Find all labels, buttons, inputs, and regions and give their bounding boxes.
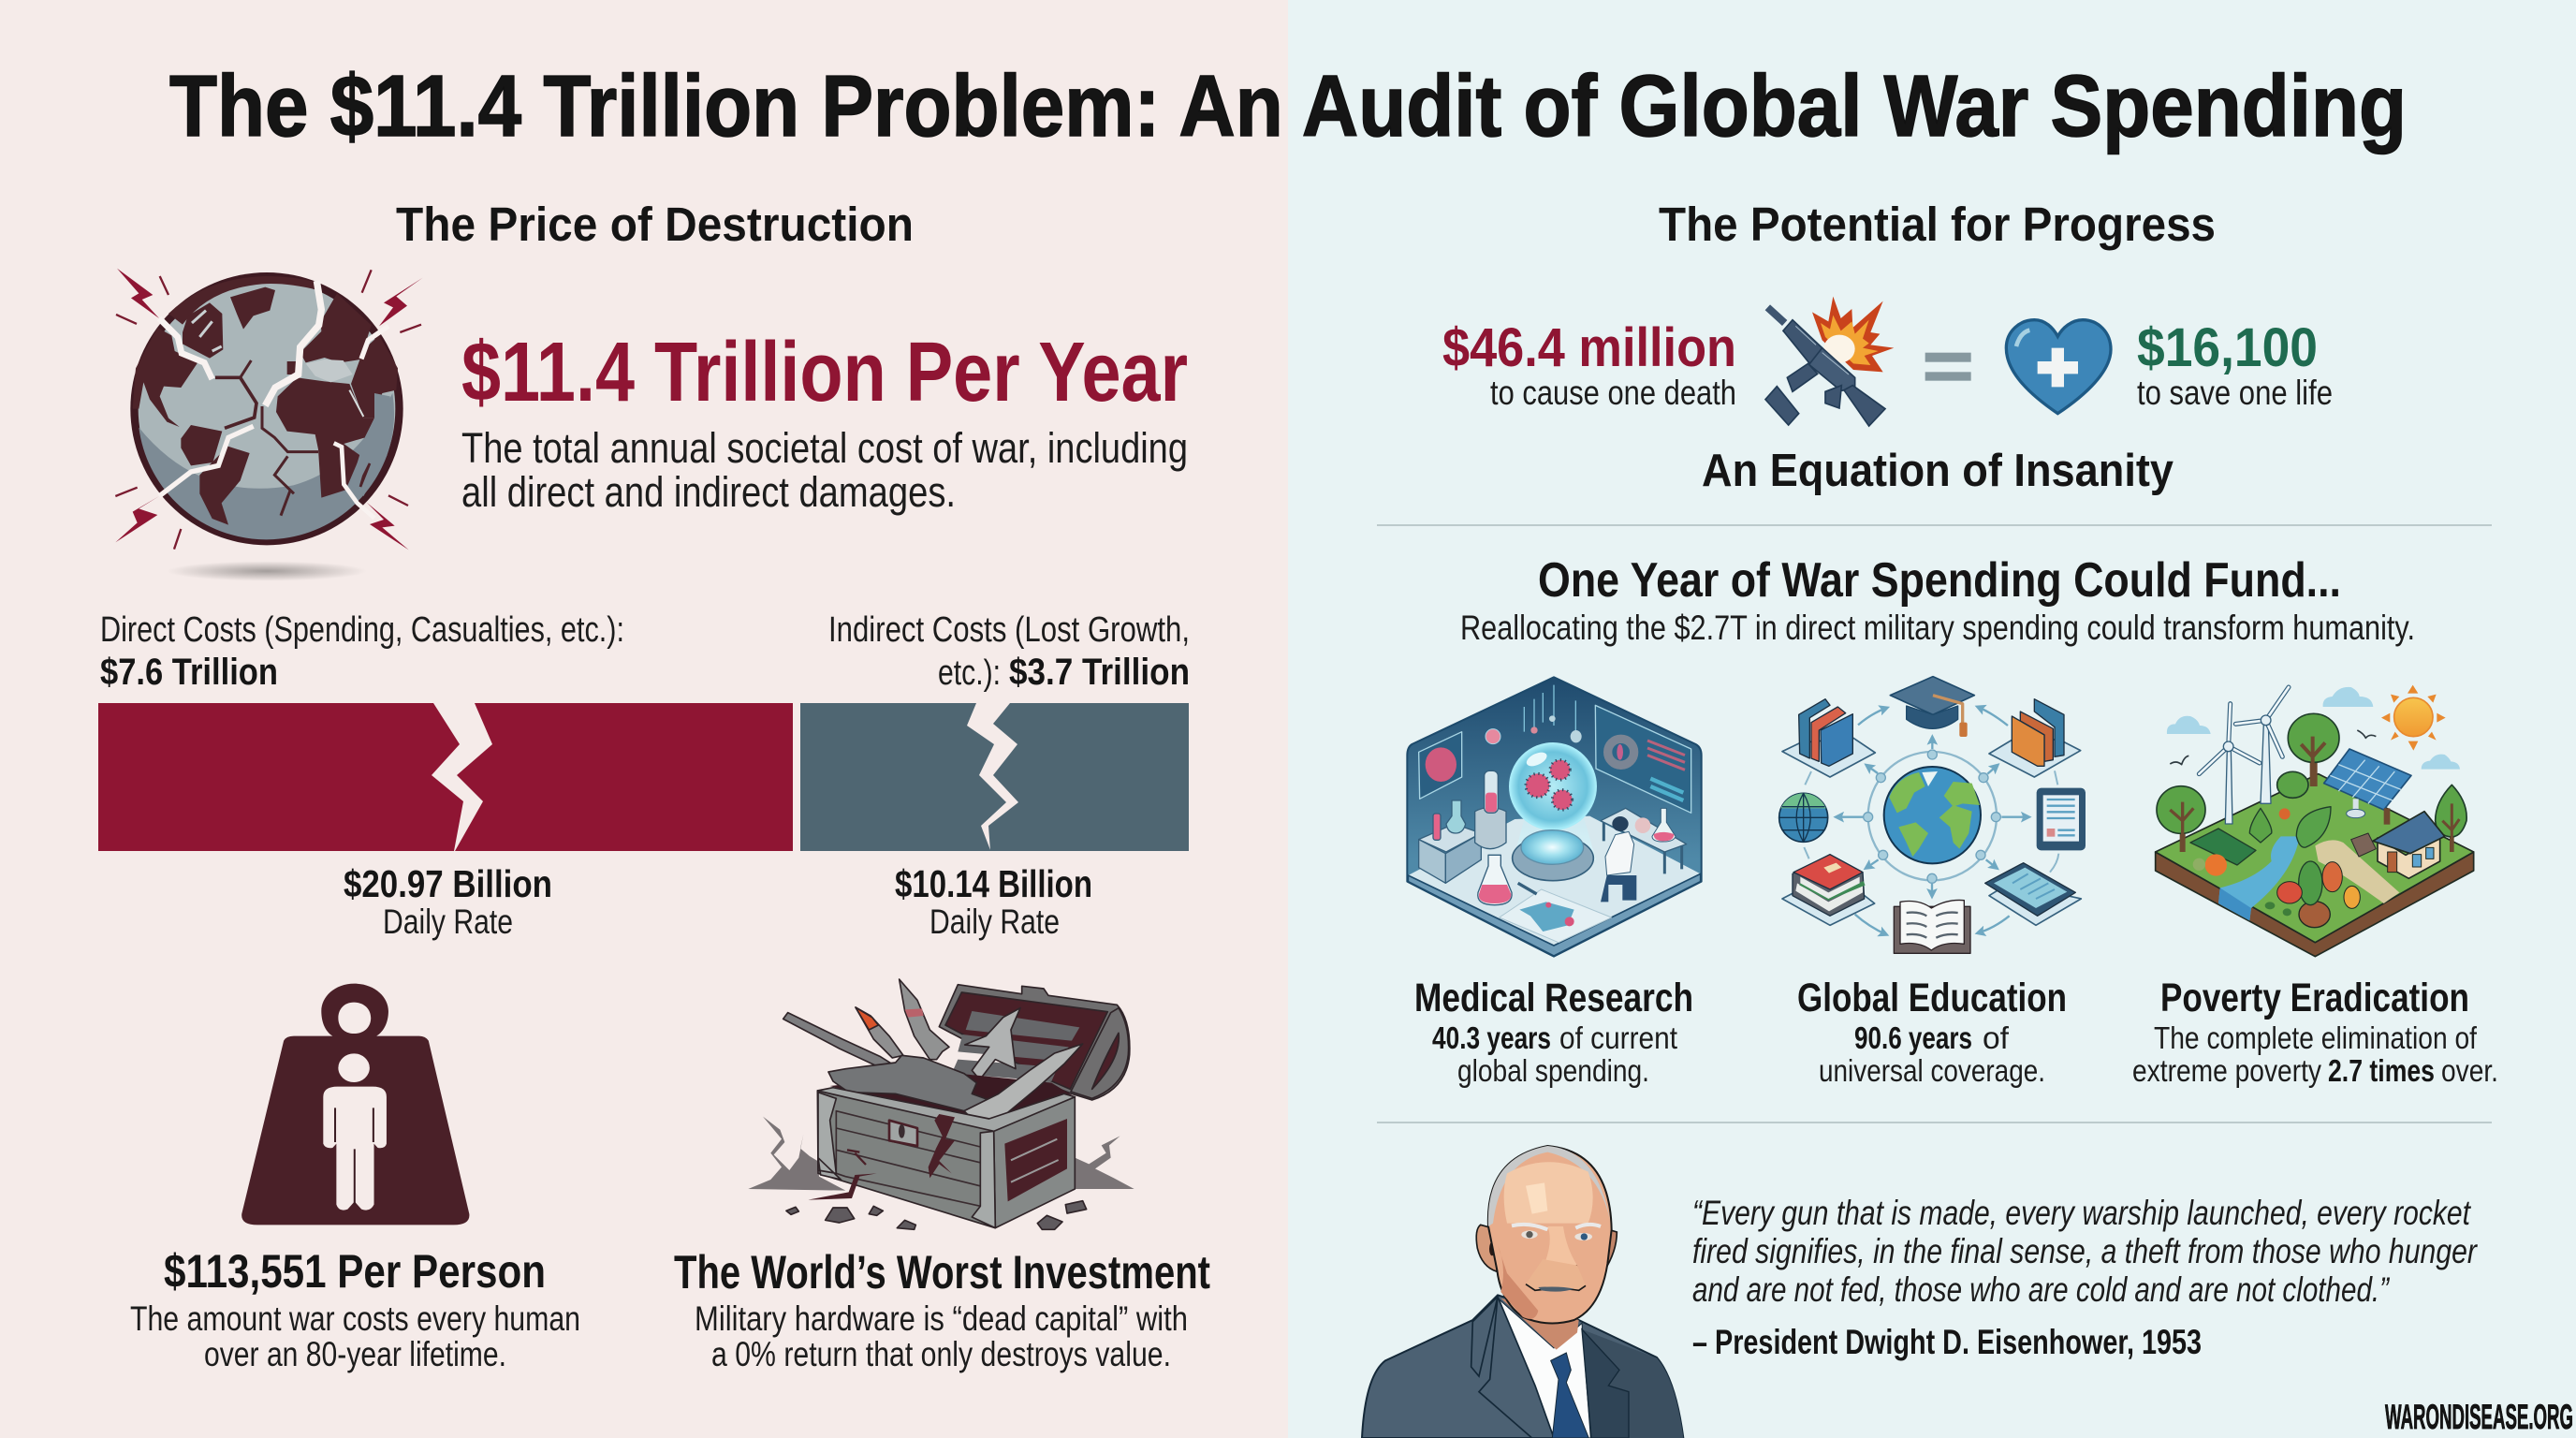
text: poverty eradication: extreme poverty: [2132, 1053, 2321, 1088]
label: direct costs: $7.6 Trillion: [100, 652, 278, 693]
chart: indirect cost bar: [800, 703, 1189, 851]
icon: medical research lab: [1407, 677, 1702, 957]
stat: cost to cause one death: to cause one death: [1490, 374, 1736, 412]
text: poverty eradication: [2132, 976, 2498, 1088]
stat: cost per person: over an 80-year lifetime.: [204, 1335, 506, 1373]
stat: worlds worst investment: Military hardware is “dead capital” with: [695, 1299, 1188, 1338]
stat: cost per person: The amount war costs every human: [130, 1299, 580, 1338]
quote: Eisenhower: [1692, 1194, 2478, 1361]
text: medical research: [1414, 976, 1693, 1088]
text: global education: Global Education: [1797, 976, 2067, 1020]
stat: cost to save one life: [2137, 317, 2333, 412]
icon: cracked globe: [115, 269, 423, 581]
text: medical research: global spending.: [1457, 1053, 1649, 1088]
icon: equals sign: [1925, 353, 1971, 381]
icon: weight with person: [242, 984, 469, 1225]
stat: worlds worst investment: a 0% return that only destroys value.: [711, 1335, 1171, 1373]
text: global education: 90.6 years: [1854, 1020, 1972, 1055]
icon: rifle with explosion: [1765, 297, 1894, 426]
stat: worlds worst investment: The World’s Worst Investment: [674, 1246, 1210, 1299]
description: total annual societal cost: The total annual societal cost of war, including: [461, 424, 1188, 472]
stat: indirect daily rate: Daily Rate: [929, 902, 1060, 941]
text: global education: universal coverage.: [1819, 1053, 2045, 1088]
icon: cracked chest of weapons: [748, 979, 1134, 1229]
description: total annual societal cost: all direct and indirect damages.: [461, 468, 956, 516]
chart: direct cost bar: [98, 703, 793, 851]
text: medical research: 40.3 years: [1432, 1020, 1551, 1055]
description: total annual societal cost: [461, 424, 1188, 516]
label: indirect costs: $3.7 Trillion: [1009, 652, 1190, 693]
heading: price of destruction: The Price of Destruction: [396, 198, 914, 251]
panel: right background: [1288, 0, 2576, 1438]
stat: cost per person: $113,551 Per Person: [164, 1245, 546, 1298]
stat: cost to cause one death: $46.4 million: [1442, 317, 1736, 378]
label: indirect costs: Indirect Costs (Lost Growth,: [828, 610, 1190, 650]
stat: direct daily rate: $20.97 Billion: [344, 862, 552, 905]
stat: cost to save one life: $16,100: [2137, 317, 2318, 378]
stat: indirect daily rate: [895, 862, 1092, 941]
icon: heart with cross: [2006, 320, 2111, 414]
stat: cost to cause one death: [1442, 317, 1736, 412]
heading: an equation of insanity: An Equation of Insanity: [1702, 446, 2174, 496]
panel: left background: [0, 0, 1288, 1438]
quote: Eisenhower: – President Dwight D. Eisenhower, 1953: [1692, 1323, 2202, 1361]
label: indirect costs: [828, 610, 1190, 693]
text: poverty eradication: Poverty Eradication: [2160, 976, 2469, 1020]
stat: cost to save one life: to save one life: [2137, 374, 2333, 412]
heading: one year of war spending: One Year of War Spending Could Fund...: [1538, 553, 2341, 608]
label: direct costs: [100, 610, 624, 693]
panel: the price of destruction: [98, 198, 1210, 1373]
stat: indirect daily rate: $10.14 Billion: [895, 862, 1092, 905]
stat: direct daily rate: Daily Rate: [383, 902, 513, 941]
text: global education: [1797, 976, 2067, 1088]
text: global education: of: [1983, 1020, 2010, 1055]
label: direct costs: Direct Costs (Spending, Casualties, etc.):: [100, 610, 624, 650]
quote: Eisenhower: and are not fed, those who are cold and are not clothed.”: [1692, 1270, 2390, 1309]
heading: potential for progress: The Potential for Progress: [1659, 198, 2216, 251]
stat: worlds worst investment: [674, 1246, 1210, 1373]
text: poverty eradication: The complete elimination of: [2154, 1020, 2478, 1055]
text: medical research: Medical Research: [1414, 976, 1693, 1020]
text: medical research: of current: [1559, 1020, 1677, 1055]
icon: global education network: [1779, 677, 2086, 953]
label: indirect costs: etc.):: [938, 653, 1001, 693]
stat: cost per person: [130, 1245, 580, 1373]
text: poverty eradication: 2.7 times: [2328, 1053, 2435, 1088]
stat: 11.4 trillion per year: $11.4 Trillion Per Year: [461, 326, 1188, 419]
panel: the potential for progress: [1362, 198, 2498, 1438]
stat: direct daily rate: [344, 862, 552, 941]
portrait: Eisenhower: [1362, 1146, 1683, 1438]
text: poverty eradication: over.: [2441, 1053, 2498, 1088]
icon: sustainable landscape: [2156, 685, 2474, 957]
